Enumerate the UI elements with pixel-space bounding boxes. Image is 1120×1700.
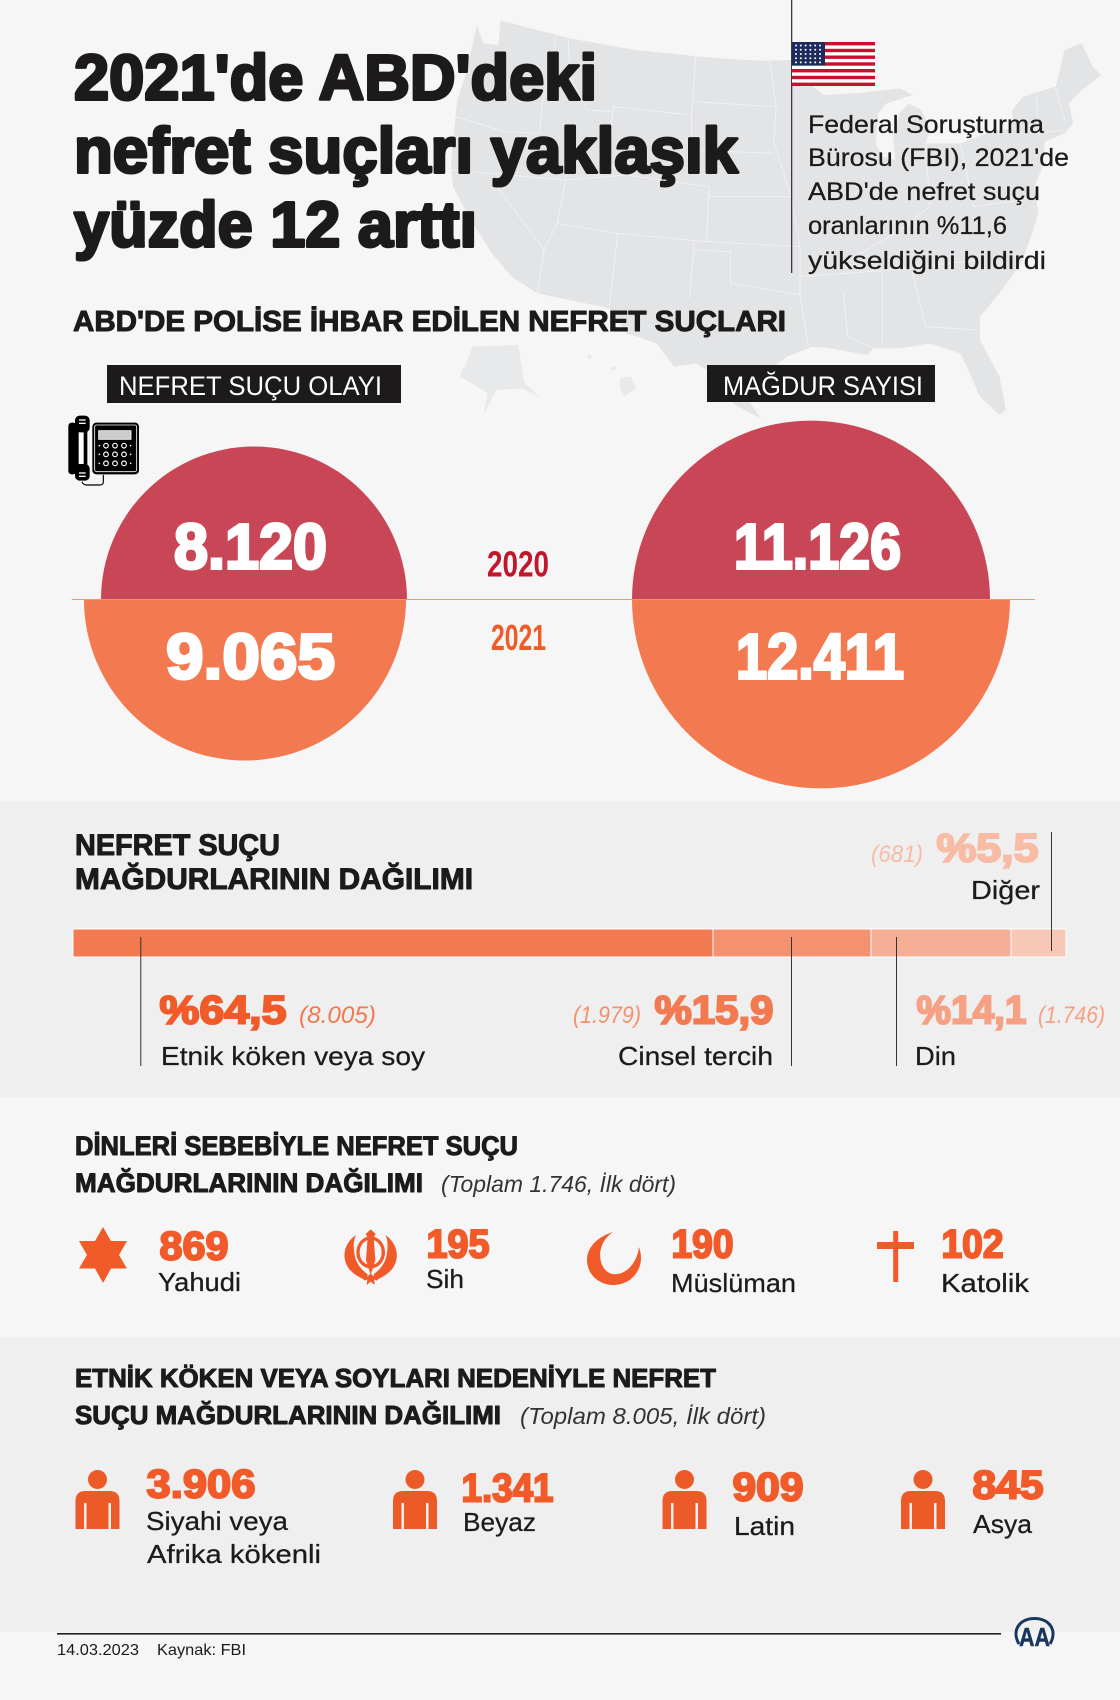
stat: Black or African: 3.906 xyxy=(146,1462,256,1506)
callout: ethnicity: %64,5 xyxy=(160,988,286,1032)
stat: Asian: 845 xyxy=(972,1464,1044,1508)
stat: Sikh: Sih xyxy=(426,1264,464,1294)
icon: person 3 xyxy=(662,1470,706,1529)
callout: ethnicity xyxy=(140,937,425,1071)
stat: Black or African: Siyahi veya xyxy=(146,1506,289,1536)
title xyxy=(74,42,738,260)
icon: person 4 xyxy=(901,1470,945,1529)
stat: White: Beyaz xyxy=(463,1507,536,1537)
heading: victim distribution: NEFRET SUÇU xyxy=(75,829,280,862)
heading: ethnicity distribution: ETNİK KÖKEN VEYA SOYLARI NEDENİYLE NEFRET xyxy=(75,1363,716,1393)
icon: khanda xyxy=(344,1229,397,1285)
chart: incidents half circles xyxy=(84,446,407,760)
label: hate crime incidents: NEFRET SUÇU OLAYI xyxy=(119,371,382,401)
heading: victim distribution: MAĞDURLARININ DAĞILIMI xyxy=(75,862,473,896)
stat: Catholic: 102 xyxy=(942,1222,1004,1266)
title: nefret suçları yaklaşık xyxy=(74,114,738,186)
footer rule xyxy=(57,1633,1001,1635)
stat: Jewish: 869 xyxy=(160,1224,228,1268)
heading: reported hate crimes: ABD'DE POLİSE İHBAR EDİLEN NEFRET SUÇLARI xyxy=(73,306,786,338)
map: United States silhouette xyxy=(451,21,1101,418)
callout: ethnicity: (8.005) xyxy=(299,1002,376,1029)
text block: FBI summary: ABD'de nefret suçu xyxy=(808,178,1040,206)
stat: White: 1.341 xyxy=(462,1466,554,1510)
stat: Catholic: Katolik xyxy=(941,1268,1030,1298)
heading: victim distribution xyxy=(75,829,473,896)
heading: religion distribution: (Toplam 1.746, İlk dört) xyxy=(441,1171,676,1197)
footer: date and source xyxy=(57,1642,246,1659)
stat: Jewish xyxy=(158,1224,241,1297)
stat: Latino xyxy=(732,1466,804,1541)
heading: religion distribution: DİNLERİ SEBEBİYLE NEFRET SUÇU xyxy=(75,1131,518,1161)
text block: FBI summary: Bürosu (FBI), 2021'de xyxy=(808,144,1069,172)
legend: 2021: 2021 xyxy=(491,617,546,658)
chart: victims half circles: 11.126 xyxy=(734,510,901,582)
text block: FBI summary: yükseldiğini bildirdi xyxy=(808,247,1046,275)
heading: ethnicity distribution: (Toplam 8.005, İlk dört) xyxy=(520,1403,766,1429)
icon: cross xyxy=(877,1231,914,1282)
callout: religion: Din xyxy=(915,1041,956,1071)
heading: ethnicity distribution: SUÇU MAĞDURLARININ DAĞILIMI xyxy=(75,1400,501,1430)
stat: Asian: Asya xyxy=(973,1509,1033,1539)
panel: religion xyxy=(75,1131,1030,1298)
stat: Muslim: Müslüman xyxy=(671,1268,796,1298)
text block: FBI summary: oranlarının %11,6 xyxy=(808,212,1007,240)
chart: victims half circles xyxy=(632,421,1010,788)
stat: Sikh: 195 xyxy=(426,1222,490,1266)
icon: crescent xyxy=(587,1232,641,1285)
stat: Latino: Latin xyxy=(734,1511,795,1541)
text block: FBI summary xyxy=(808,111,1069,275)
bar chart: victim share xyxy=(73,929,1066,957)
logo: AA: AA xyxy=(1019,1622,1050,1652)
callout: religion xyxy=(896,937,1105,1071)
heading: religion distribution xyxy=(75,1131,676,1198)
heading: ethnicity distribution xyxy=(75,1363,766,1430)
text block: FBI summary: Federal Soruşturma xyxy=(808,111,1044,139)
icon: telephone xyxy=(68,416,139,485)
panel: ethnicity xyxy=(0,1337,1120,1632)
callout: other: %5,5 xyxy=(936,826,1038,870)
title: 2021'de ABD'deki xyxy=(74,42,597,114)
stat: Latino: 909 xyxy=(732,1466,804,1510)
icon: person 2 xyxy=(393,1470,437,1529)
stat: Asian xyxy=(972,1464,1044,1539)
chart: victims half circles: 12.411 xyxy=(736,620,904,692)
icon: US flag xyxy=(792,42,875,86)
title: yüzde 12 arttı xyxy=(74,188,477,260)
chart: incidents half circles: 9.065 xyxy=(166,620,335,692)
callout: sexual orientation: %15,9 xyxy=(654,988,774,1032)
stat: Muslim xyxy=(671,1222,796,1298)
flagpole line xyxy=(791,0,792,273)
footer: date and source: Kaynak: FBI xyxy=(157,1642,246,1659)
icon: star of David xyxy=(79,1227,127,1283)
heading: religion distribution: MAĞDURLARININ DAĞILIMI xyxy=(75,1168,423,1198)
callout: sexual orientation: Cinsel tercih xyxy=(618,1041,773,1071)
stat: Catholic xyxy=(941,1222,1030,1298)
icon: person 1 xyxy=(76,1470,120,1529)
callout: religion: %14,1 xyxy=(916,988,1026,1032)
divider axis between years xyxy=(72,599,1035,600)
stat: Sikh xyxy=(426,1222,490,1294)
chart: incidents half circles: 8.120 xyxy=(174,510,327,582)
stat: Black or African xyxy=(146,1462,321,1569)
callout: religion: (1.746) xyxy=(1038,1002,1105,1029)
callout: other xyxy=(871,826,1052,951)
panel: victim distribution xyxy=(0,801,1120,1097)
legend: 2020: 2020 xyxy=(487,544,549,584)
callout: other: (681) xyxy=(871,841,923,868)
stat: Muslim: 190 xyxy=(672,1222,734,1266)
footer: date and source: 14.03.2023 xyxy=(57,1642,139,1659)
callout: sexual orientation: (1.979) xyxy=(573,1002,641,1029)
stat: Black or African: Afrika kökenli xyxy=(147,1539,321,1569)
label: victim count: MAĞDUR SAYISI xyxy=(723,370,923,401)
callout: ethnicity: Etnik köken veya soy xyxy=(161,1041,425,1071)
stat: Jewish: Yahudi xyxy=(158,1267,241,1297)
callout: other: Diğer xyxy=(971,875,1040,905)
callout: sexual orientation xyxy=(573,937,792,1071)
stat: White xyxy=(462,1466,554,1537)
